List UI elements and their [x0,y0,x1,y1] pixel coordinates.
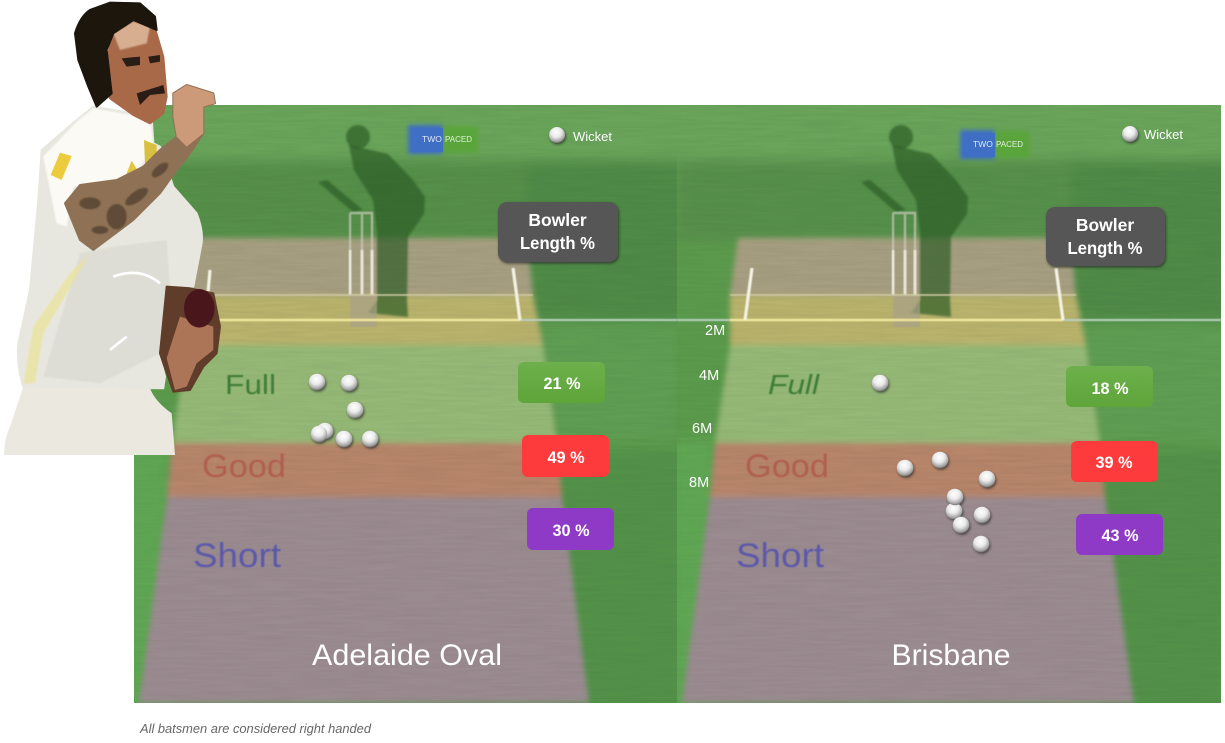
callout: bowler length: Length % [1068,238,1143,258]
stat: short 30% [527,508,614,550]
stat: short 30%: 30 % [552,521,590,540]
callout: bowler length: Bowler [1076,215,1134,235]
stat: good 39% [1071,441,1158,482]
stat: good 39%: 39 % [1096,453,1132,472]
legend: wicket: Wicket [1144,127,1183,142]
stat: full 18% [1066,366,1153,407]
legend: wicket: Wicket [573,129,612,144]
logo: Two Paced: TWO [973,139,993,149]
zone labels [736,369,829,575]
footnote: All batsmen are considered right handed [139,722,372,736]
zone labels: Full [225,369,276,400]
stat: short 43% [1076,514,1163,555]
panel: Brisbane pitch map [670,95,1225,713]
ball in hand [184,289,215,328]
distance scale [689,323,725,491]
icon: stumps [350,213,377,327]
icon: batsman shadow [318,125,425,317]
stat: good 49%: 49 % [548,448,584,467]
wicket balls: Adelaide [309,374,378,447]
shirt [18,107,202,388]
shoulder patches [51,153,72,180]
zone labels: Good [202,448,286,484]
venue title: Adelaide Oval: Adelaide Oval [312,639,502,672]
illustration: fast bowler [4,3,220,455]
trousers [4,387,175,455]
venue title: Brisbane: Brisbane [892,639,1010,672]
stat: full 21% [518,362,605,403]
distance scale: 4M [699,368,719,384]
logo: Two Paced [960,130,1030,159]
panel: Adelaide Oval pitch map [120,95,690,713]
legend: wicket [1122,126,1183,142]
stat: full 18%: 18 % [1092,379,1128,398]
wicket balls: Brisbane [872,375,995,552]
zone labels: Good [745,448,829,484]
stat: full 21%: 21 % [544,374,580,393]
zone labels: Short [736,537,825,575]
crease lines [677,268,1221,320]
distance scale: 6M [692,421,712,437]
tattooed forearm [65,85,215,250]
callout: bowler length [498,202,618,262]
stat: good 49% [522,435,609,477]
zone labels: Short [193,537,282,575]
distance scale: 2M [705,323,725,339]
stat: short 43%: 43 % [1102,526,1138,545]
logo: Two Paced [408,125,478,154]
logo: Two Paced: PACED [996,140,1023,149]
callout: bowler length [1046,207,1165,266]
distance scale: 8M [689,475,709,491]
callout: bowler length: Bowler [528,210,587,230]
icon: stumps [893,213,920,327]
logo: Two Paced: PACED [445,135,472,144]
legend: wicket [549,127,612,144]
callout: bowler length: Length % [520,233,595,253]
face [103,22,167,123]
hair [75,3,157,107]
icon: batsman shadow [861,125,968,317]
zone labels [193,369,286,575]
crease lines [187,268,677,320]
zone labels: Full [768,369,820,400]
lower arm [160,287,220,392]
logo: Two Paced: TWO [422,134,442,144]
